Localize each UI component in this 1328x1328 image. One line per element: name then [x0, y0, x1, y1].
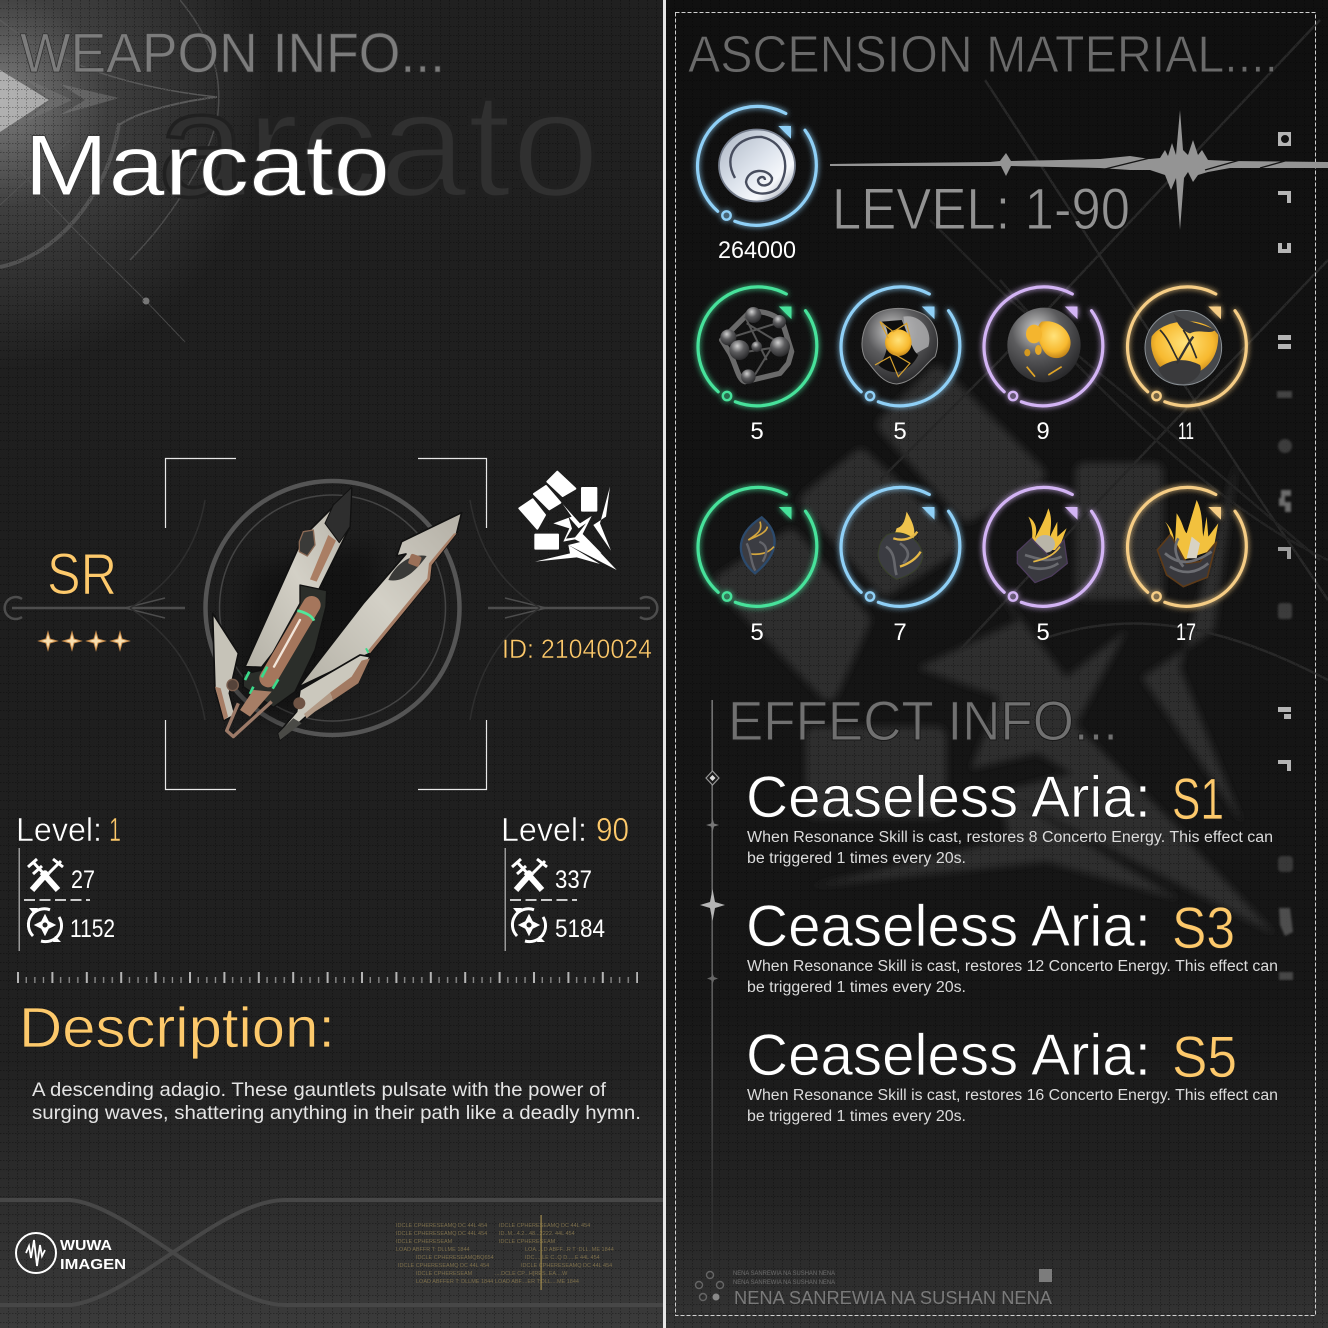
description text: surging waves, shattering anything in their path like a deadly hymn. [32, 1102, 641, 1124]
timeline [700, 700, 725, 1290]
rarity label: SR [47, 542, 117, 607]
data readout: IDCLE CPHERESEAMQBQ654 [416, 1255, 494, 1261]
logo: IMAGEN [60, 1256, 126, 1273]
bottom glyph plate: NENA SANREWIA NA SUSHAN NENA [733, 1279, 836, 1286]
stats: level 1 [16, 811, 121, 951]
watermark name: Marcato [25, 60, 600, 228]
panel: ascension material [666, 0, 1328, 1328]
stats: level 90: Level: [501, 811, 587, 848]
stats: level 90: 5184 [555, 915, 605, 943]
waveform [830, 110, 1328, 230]
material: tier 1 flame: 5 [750, 619, 764, 646]
panel: weapon info [0, 0, 663, 1328]
weapon illustration [213, 487, 462, 740]
effect: S3: be triggered 1 times every 20s. [747, 979, 966, 996]
effect: S1: S1 [1172, 767, 1224, 832]
stats: level 1: 27 [71, 866, 95, 894]
stats: level 1: 1152 [70, 915, 115, 943]
dashed frame [676, 12, 1316, 1316]
data readout: ID..M...4.2...48...2222. 44L 454 [499, 1231, 575, 1237]
heading: ascension material: ASCENSION MATERIAL.... [688, 26, 1278, 84]
material: tier 4 metal [1128, 287, 1246, 445]
material: tier 1 flame [698, 487, 817, 646]
bottom glyph plate: NENA SANREWIA NA SUSHAN NENA [733, 1270, 836, 1277]
left arm [245, 488, 352, 667]
rarity stars [39, 632, 129, 650]
panel divider [663, 0, 666, 1328]
data readout: IDCLE CPHERESEAMQ DC 44L 454 [521, 1263, 612, 1269]
weapon id: ID: 21040024 [502, 634, 652, 664]
logo: WUWA [60, 1237, 112, 1254]
bottom glyph plate: NENA SANREWIA NA SUSHAN NENA [734, 1288, 1052, 1308]
material: tier 2 metal: 5 [893, 418, 907, 445]
material: tier 3 metal: 9 [1036, 418, 1050, 445]
material: tier 1 metal [698, 287, 817, 445]
effect: S1: be triggered 1 times every 20s. [747, 850, 966, 867]
level range: LEVEL: 1-90 [832, 177, 1130, 242]
effect: S5: be triggered 1 times every 20s. [747, 1108, 966, 1125]
data readout: IDCLE CPHERESEAMQ DC 44L 454 [396, 1231, 487, 1237]
effect: S5: Ceaseless Aria: [746, 1023, 1151, 1088]
effect: S1: Ceaseless Aria: [746, 765, 1151, 830]
icon: gauntlet type [519, 472, 617, 570]
material: tier 3 metal [984, 287, 1103, 445]
side glyph column [1277, 132, 1293, 980]
effect: S1: When Resonance Skill is cast, restores 8 Concerto Energy. This effect can [747, 829, 1273, 846]
icon: attack [512, 859, 547, 890]
bottom glyph plate [696, 1269, 1052, 1308]
material: tier 2 flame [841, 487, 960, 646]
heading: effect info: EFFECT INFO... [728, 689, 1118, 752]
watermark gauntlet [724, 375, 1275, 934]
data readout: IDCLE CPHERESEAMQ DC 44L 454 [396, 1223, 487, 1229]
starburst ornament [0, 0, 219, 342]
heading: weapon info: WEAPON INFO... [20, 21, 445, 84]
effect: S3 [746, 894, 1278, 996]
loop [227, 702, 272, 737]
material: tier 3 flame: 5 [1036, 619, 1050, 646]
effect: S5: S5 [1172, 1025, 1237, 1090]
data readout: IDCLE CPHERESEAMQ DC 44L 454 [398, 1263, 489, 1269]
material: tier 1 metal: 5 [750, 418, 764, 445]
description text: A descending adagio. These gauntlets pulsate with the power of [32, 1079, 607, 1101]
heading: description: Description: [19, 996, 335, 1060]
material: shell credit [698, 106, 816, 264]
stats: level 1: Level: [16, 811, 102, 848]
data readout [396, 1215, 614, 1290]
material: tier 3 flame [984, 487, 1103, 646]
data readout: IDCLE CPHERESEAMQ DC 44L 454 [499, 1223, 590, 1229]
description text [32, 1079, 641, 1124]
stats: level 1: 1 [109, 811, 121, 848]
data readout: ....DCLE CP...H[RES..EA....W [495, 1271, 568, 1277]
effect: S3: S3 [1172, 896, 1235, 961]
effect: S3: Ceaseless Aria: [746, 894, 1151, 959]
weapon frame [166, 458, 486, 790]
effect: S3: When Resonance Skill is cast, restores 12 Concerto Energy. This effect can [747, 958, 1278, 975]
stats: level 90: 337 [555, 866, 592, 894]
weapon name: Marcato [24, 118, 390, 214]
background line pattern [880, 20, 1328, 680]
effect: S5 [746, 1023, 1278, 1125]
side ornaments [5, 500, 657, 720]
material: tier 2 metal [841, 287, 960, 445]
data readout: LOA...LD ABFF...R T :DLL..ME 1844 [525, 1247, 614, 1253]
left fin [213, 613, 238, 721]
data readout: LOAD ABFFER T: DLLME 1844 [416, 1279, 493, 1285]
material: tier 4 flame: 17 [1176, 619, 1196, 646]
effect: S1 [746, 765, 1273, 867]
grid texture [0, 0, 663, 1328]
stats: level 90: 90 [596, 811, 629, 848]
effect: S5: When Resonance Skill is cast, restores 16 Concerto Energy. This effect can [747, 1087, 1278, 1104]
data readout: IDC.....LE C..Q D.....E 44L 454 [525, 1255, 600, 1261]
material: tier 2 flame: 7 [893, 619, 907, 646]
material: shell credit: 264000 [718, 237, 796, 264]
data readout: LOAD ABFFR T: DLLME 1844 [396, 1247, 470, 1253]
material: tier 4 flame [1128, 487, 1246, 646]
stats: level 90 [501, 811, 629, 951]
grid texture [666, 0, 1328, 1328]
logo [16, 1233, 126, 1273]
data readout: IDCLE CPHERESEAM [416, 1271, 473, 1277]
material: tier 4 metal: 11 [1178, 418, 1194, 445]
icon: health [512, 908, 546, 942]
ruler [17, 972, 638, 983]
icon: health [28, 908, 62, 942]
weapon ring [206, 481, 460, 735]
right blade [298, 513, 462, 687]
data readout: IDCLE CPHERESEAM [396, 1239, 453, 1245]
data readout: LOAD ABF....ER T:DLL....ME 1844 [495, 1279, 579, 1285]
icon: attack [28, 859, 63, 890]
bottom band ornament [0, 1200, 663, 1305]
data readout: IDCLE CPHERESEAM [499, 1239, 556, 1245]
